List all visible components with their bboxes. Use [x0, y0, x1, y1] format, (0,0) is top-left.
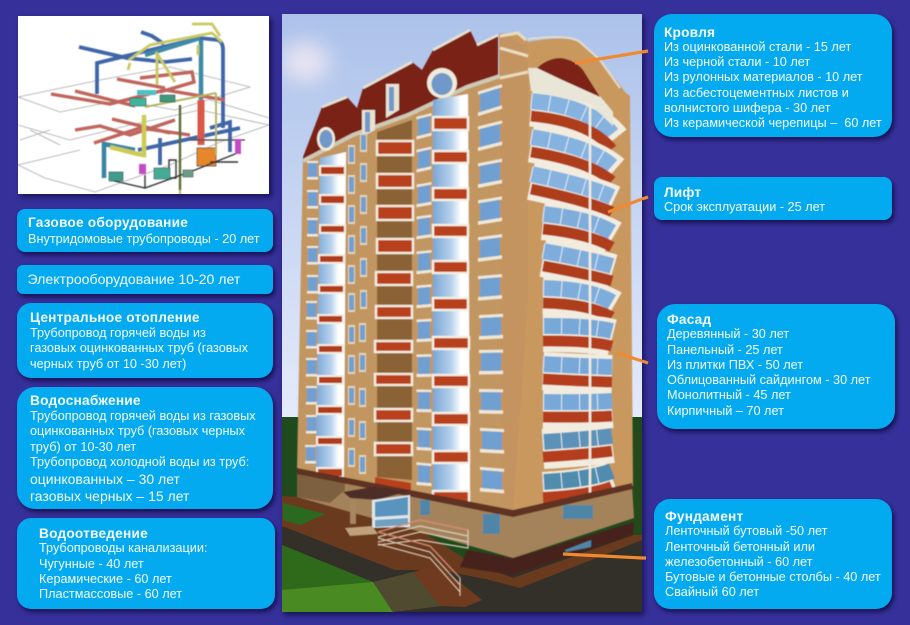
- panel: roof: Из оцинкованной стали - 15 лет Из черной стали - 10 лет Из рулонных материалов - 10 лет Из асбестоцементных листов и волнистого шифера - 30 лет Из керамической черепицы – 60 лет: [664, 40, 882, 130]
- ground: [282, 417, 642, 612]
- pointer: facade: [617, 353, 642, 361]
- wing windows column D: [416, 113, 432, 486]
- panel: water supply: Водоснабжение: [30, 393, 141, 408]
- building illustration: [282, 14, 642, 612]
- panel: drainage: Водоотведение: [39, 526, 148, 541]
- panel: drainage: [17, 518, 275, 609]
- panel: water supply: [17, 387, 273, 509]
- central bay: [433, 94, 470, 503]
- panel: central heating: [17, 303, 273, 378]
- sky: [282, 14, 642, 434]
- panel: facade: [657, 304, 895, 429]
- entrance canopy and glazing: [343, 487, 410, 536]
- loggia column: [375, 120, 413, 492]
- pointer: roof: [575, 52, 642, 63]
- dormer windows: [317, 68, 457, 151]
- panel: foundation: [654, 499, 892, 609]
- panel: central heating: Трубопровод горячей воды из газовых оцинкованных труб (газовых черных труб от 10 -30 лет): [30, 326, 248, 370]
- right wall and corner pilaster: [499, 32, 633, 512]
- panel: facade: Фасад: [667, 312, 711, 327]
- wing windows column A: [305, 161, 318, 464]
- left wing wall: [297, 75, 513, 512]
- panel: elevator: Лифт: [664, 184, 701, 200]
- panel: facade: Деревянный - 30 лет Панельный - 25 лет Из плитки ПВХ - 50 лет Облицованный сайдингом - 30 лет Монолитный - 45 лет Кирпичный – 70 лет: [667, 327, 871, 418]
- basement windows: [420, 500, 593, 552]
- plinth: [460, 522, 634, 575]
- basement shaded part: [297, 470, 345, 503]
- balustrade under dome: [528, 68, 613, 126]
- panel: electrical equipment: [17, 265, 273, 294]
- wing windows column C: [359, 133, 367, 474]
- panel: roof: [654, 14, 892, 137]
- eave cornice: [303, 76, 500, 161]
- pointer: elevator: [608, 199, 642, 212]
- panel: roof: Кровля: [664, 24, 715, 40]
- roof: [303, 30, 498, 162]
- wing windows column E: [478, 84, 504, 493]
- panel: foundation: Фундамент: [665, 509, 743, 524]
- left bay: [316, 152, 346, 477]
- panel: gas equipment: Газовое оборудование: [28, 215, 188, 230]
- basement: [297, 470, 634, 558]
- entrance stairs railing: [378, 520, 468, 596]
- pointer ends over background: [642, 49, 648, 560]
- panel: gas equipment: [17, 209, 273, 252]
- panel: elevator: Срок эксплуатации - 25 лет: [664, 200, 825, 214]
- arch cornice: [528, 37, 620, 88]
- panel: water supply: Трубопровод горячей воды из газовых оцинкованных труб (газовых черных труб) от 10-30 лет Трубопровод холодной воды из труб: оцинкованных – 30 лет газовых черных – 15 лет: [30, 408, 256, 504]
- right bay: [531, 100, 612, 500]
- panel: central heating: Центральное отопление: [30, 310, 200, 325]
- panel: drainage: Трубопроводы канализации: Чугунные - 40 лет Керамические - 60 лет Пластмассовые - 60 лет: [39, 541, 207, 601]
- pointer: foundation: [563, 554, 642, 558]
- panel: foundation: Ленточный бутовый -50 лет Ленточный бетонный или железобетонный - 60 лет Бутовые и бетонные столбы - 40 лет Свайный 60 лет: [665, 524, 881, 599]
- wing windows column B: [348, 145, 355, 467]
- panel: elevator: [654, 177, 892, 220]
- engineering pipes diagram: [18, 16, 269, 194]
- basement dark belt: [297, 468, 633, 517]
- panel: electrical equipment: Электрооборудование 10-20 лет: [28, 271, 240, 287]
- panel: gas equipment: Внутридомовые трубопроводы - 20 лет: [28, 232, 260, 246]
- right dome roof: [537, 58, 600, 97]
